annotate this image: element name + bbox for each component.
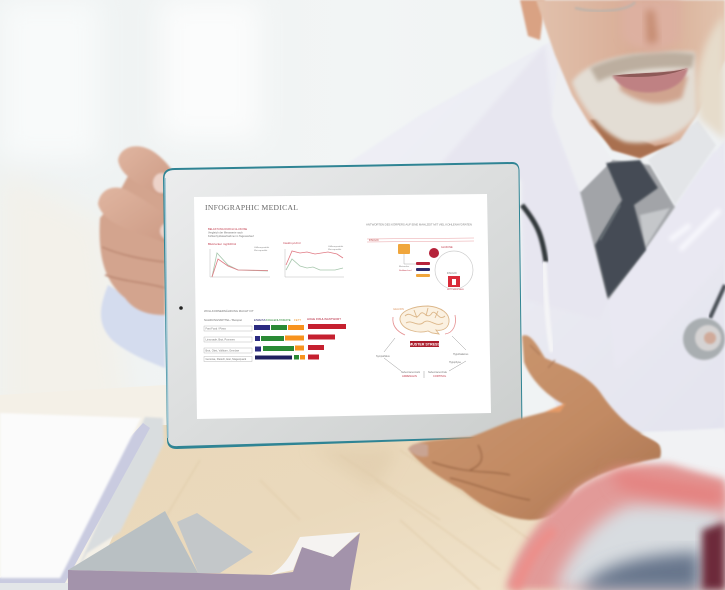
diagram: insulin pathway [367,238,474,291]
stacked bar rows [204,324,346,362]
label: stress [410,341,439,347]
heading: meal composition: NAHRUNGSMITTEL / Beispiel [204,318,242,322]
diagram: brain stress cycle: Hypophyse [449,361,462,364]
diagram: insulin pathway: Blutzucker [399,265,409,268]
chart: glucose curve: Vollkornprodukt [254,246,269,249]
heading: insulin pathway: ANTWORTEN DES KÖRPERS AUF EINE MAHLZEIT MIT VIEL KOHLENHYDRATEN [366,222,472,226]
palm [100,176,166,315]
heading: meal composition: WOLLKORNERNÄHRUNG MACHT FIT [204,309,254,313]
stacked bar rows: Brot, Obst, Vollkorn, Gemüse [206,348,240,352]
diagram: brain stress cycle: CORTISOL [433,374,447,378]
legend: bars: EIWEISS [254,318,266,322]
intro text block: BELASTUNG DURCH GLUKOSE [208,227,247,231]
diagram: insulin pathway: GLUKOSE [441,246,453,249]
blurred hair at right edge [696,15,725,140]
chart: glucose curve: Weissprodukt [254,249,268,252]
diagram: insulin pathway: INSULIN [447,272,457,275]
diagram: brain stress cycle: Nebennierenrinde [428,371,448,374]
shirt collar [552,65,612,192]
chart: insulin curve [283,241,344,277]
intro text block: Vergleich der Messwerte nach [208,230,243,234]
chart: insulin curve: Weissprodukt [328,248,342,251]
tablet screen infographic [194,194,491,419]
chart: insulin curve: Insulin µU/ml [283,241,301,245]
diagram: insulin pathway: INSULIN [369,239,379,242]
upper finger [118,146,177,196]
chart: glucose curve [208,242,270,277]
chart: insulin curve: Vollkornprodukt [328,245,343,248]
diagram: brain stress cycle [376,306,469,378]
diagram: brain stress cycle: ADRENALIN [402,374,417,378]
stacked bar rows: Limonade, Brot, Pommes [206,338,235,342]
intro text block: Kohlenhydrataufnahme im Tagesverlauf [208,234,254,238]
diagram: brain stress cycle: Hypothalamus [453,353,469,356]
diagram: insulin pathway: Stoffwechsel [399,269,412,272]
legend: bars: HOHE INSULINANTWORT [307,317,341,321]
diagram: brain stress cycle: MUSTER STRESS [409,343,440,347]
tablet device [163,162,522,449]
coat sleeve left [101,285,165,368]
diagram: brain stress cycle: GEHIRN [393,307,404,311]
shirt under collar [580,160,675,300]
chart: glucose curve: Blutzucker mg/100ml [208,242,236,246]
icon: brain [400,306,449,334]
tie [595,160,658,298]
loose grey and purple papers [68,511,360,590]
heading: meal composition [204,309,254,322]
legend: bars [254,317,341,322]
coat cuff right [640,428,725,480]
left hand holding tablet [98,146,181,315]
diagram: brain stress cycle: Sympathikus [376,355,390,358]
binder and white paper on table [0,413,164,590]
intro text block [208,227,254,238]
legend: bars: FETT [294,318,301,322]
stacked bar rows: Gemüse, Fleisch, Eier, Magerquark [206,357,247,361]
wooden table [0,385,725,590]
doctor: white coat [345,42,725,432]
legend: bars: KOHLENHYDRATE [266,318,291,322]
blurred plaid shirt in foreground [505,464,725,590]
right hand holding tablet [408,335,661,520]
lower finger [98,188,181,243]
diagram: brain stress cycle: Nebennierenmark [401,371,421,374]
title: INFOGRAPHIC MEDICAL [205,203,298,212]
diagram: insulin pathway: FETTSPEICHER [447,289,464,291]
stethoscope [522,205,725,360]
stacked bar rows: Fast Food / Pizza [206,326,226,330]
doctor: face and beard [520,0,725,158]
